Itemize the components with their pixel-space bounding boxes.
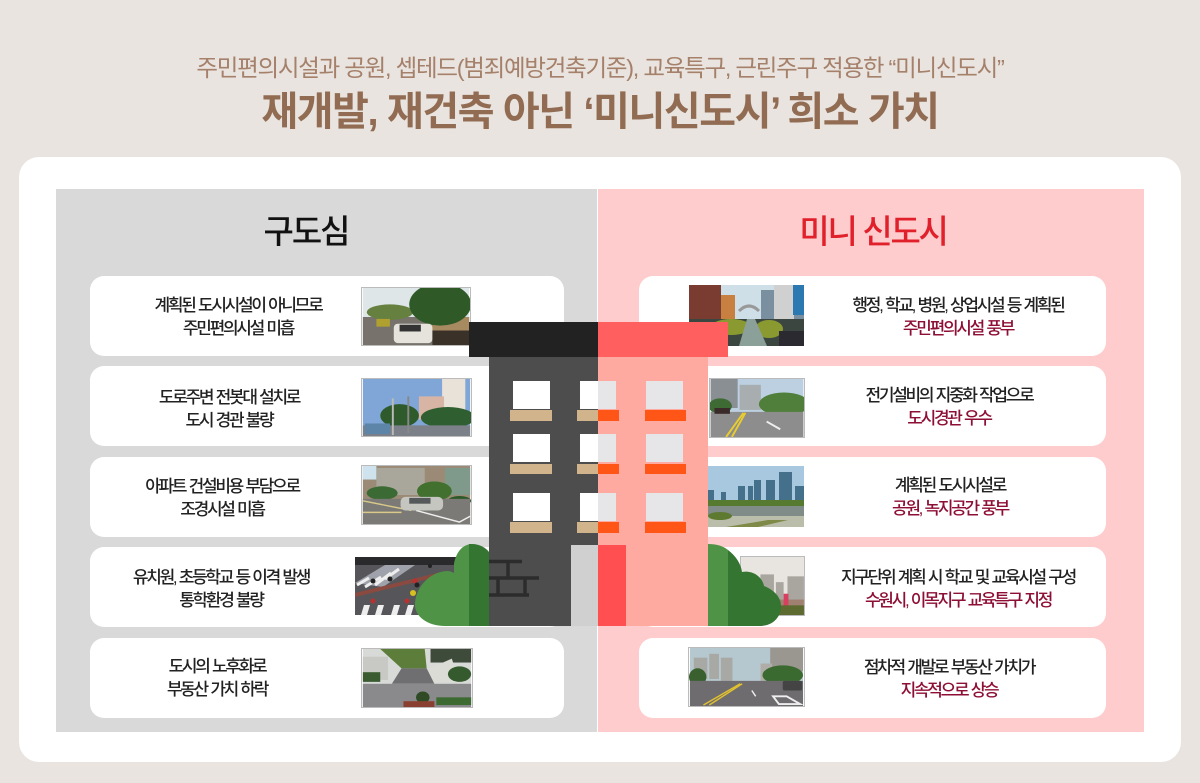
heading: old downtown: 구도심 [263,213,349,250]
right text 1 [852,296,1064,338]
door: new [598,545,626,626]
photo: school district view [740,556,805,616]
right text 2 [866,386,1034,428]
right card 4 [639,547,1106,627]
building: new half wall [598,357,708,626]
left text 2 [159,388,301,430]
right text 1: 주민편의시설 풍부 [903,319,1013,338]
subtitle: 주민편의시설과 공원, 셉테드(범죄예방건축기준), 교육특구, 근린주구 적용한 “미니신도시” [196,55,1004,81]
right text 3: 공원, 녹지공간 풍부 [892,499,1008,518]
left card 1 [90,276,564,356]
right text 3 [892,476,1010,518]
right text 5 [864,658,1036,700]
right text 2: 도시경관 우수 [907,409,991,428]
right card 1 [639,276,1106,356]
left text 3: 조경시설 미흡 [180,500,264,519]
photo: skyline and park [708,466,804,527]
building illustration [415,322,781,626]
left text 4: 유치원, 초등학교 등 이격 발생 [133,568,309,587]
left text 3 [145,477,300,519]
left text 2: 도로주변 전봇대 설치로 [159,388,299,407]
door: old [571,545,598,626]
right card 2 [639,366,1106,446]
right text 4: 수원시, 이목지구 교육특구 지정 [865,591,1051,610]
main white panel [19,157,1181,762]
right text 4 [841,568,1076,610]
right text 1: 행정, 학교, 병원, 상업시설 등 계획된 [852,296,1064,315]
left text 1: 계획된 도시시설이 아니므로 [155,296,321,315]
right text 5: 지속적으로 상승 [901,681,997,700]
icon: right tree [708,544,781,626]
cracked bricks [489,562,539,595]
left text 2: 도시 경관 불량 [186,411,272,430]
building: old half wall [489,357,598,626]
right text 2: 전기설비의 지중화 작업으로 [866,386,1032,405]
left text 5: 도시의 노후화로 [169,657,265,676]
left card 4 [90,547,564,627]
right card 5 [639,638,1106,718]
title: 재개발, 재건축 아닌 ‘미니신도시’ 희소 가치 [261,90,939,134]
left card 2 [90,366,564,446]
photo: boulevard with apartments [688,647,805,707]
left text 5 [167,657,269,699]
left text 1: 주민편의시설 미흡 [183,319,293,338]
photo: sloped road [361,648,473,708]
icon: left tree [415,544,489,626]
left text 3: 아파트 건설비용 부담으로 [145,477,299,496]
photo: wide road with yellow lines [709,378,805,438]
left card 5 [90,638,564,718]
heading: mini new town: 미니 신도시 [799,213,947,250]
photo: utility pole and apartments [361,378,472,437]
photo: street with parked car and tree [361,287,471,346]
photo: children on crosswalk [355,557,456,615]
panel: old downtown [56,189,597,732]
right text 4: 지구단위 계획 시 학교 및 교육시설 구성 [841,568,1075,587]
photo: apartment and parking lot [361,465,472,525]
building: old roof [469,322,598,357]
right card 3 [639,457,1106,537]
left text 5: 부동산 가치 하락 [167,680,267,699]
left text 1 [155,296,323,338]
photo: stream with shops [689,285,804,346]
right text 5: 점차적 개발로 부동산 가치가 [864,658,1034,677]
left text 4 [133,568,310,610]
panel: mini new town [598,189,1144,732]
building: new roof [598,322,728,357]
left card 3 [90,457,564,537]
windows [510,381,686,533]
left text 4: 통학환경 불량 [179,591,263,610]
right text 3: 계획된 도시시설로 [895,476,1005,495]
